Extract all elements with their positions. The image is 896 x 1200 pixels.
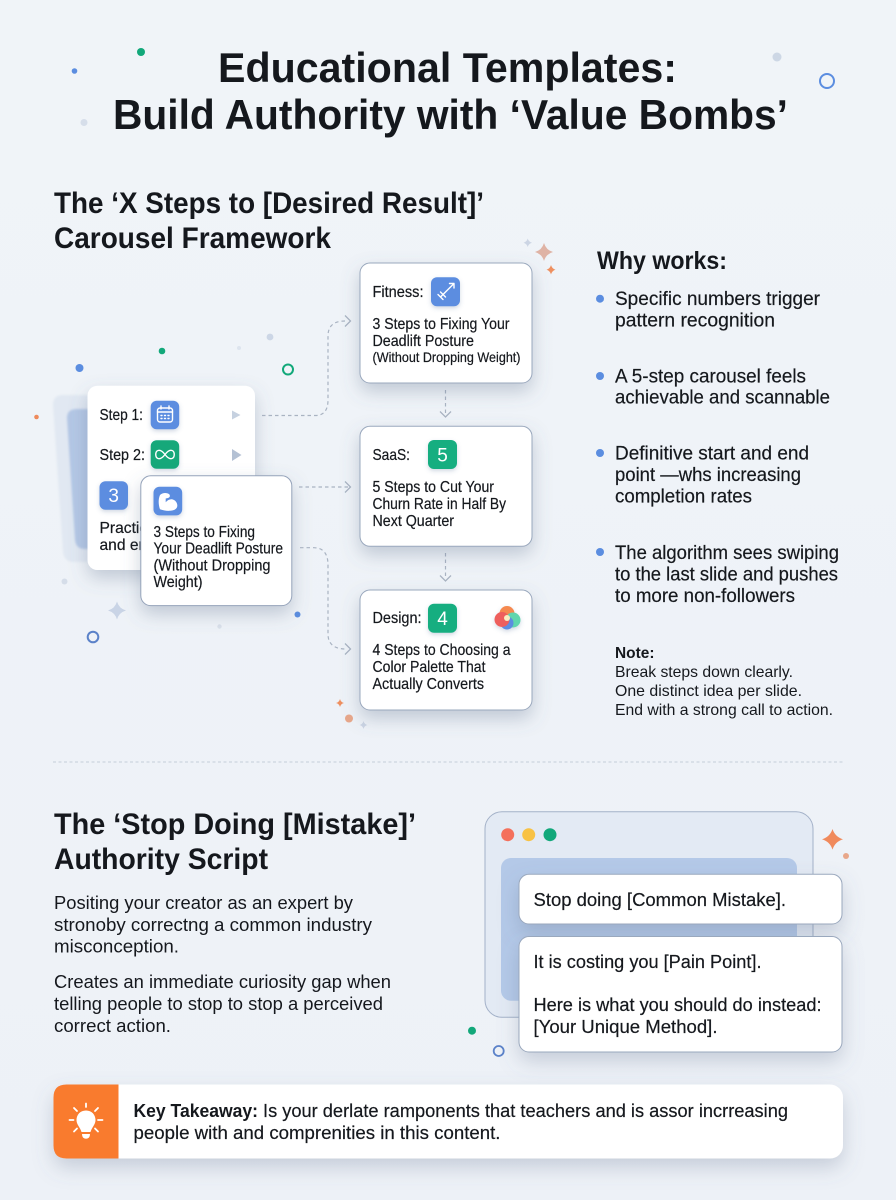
text block: curiosity gap paragraph: Creates an immediate curiosity gap when (54, 971, 391, 992)
bullet 2 (596, 366, 830, 408)
heading: why works: Why works: (597, 247, 727, 275)
script bubble: stop doing: Stop doing [Common Mistake]. (534, 889, 786, 910)
title: Build Authority with ‘Value Bombs’ (113, 91, 788, 138)
text block: positioning paragraph (54, 892, 373, 956)
bullet 1 (596, 288, 820, 332)
script bubble: pain point and method (519, 936, 842, 1052)
arrow: steps card to fitness card (262, 316, 350, 416)
note: Note: (615, 645, 654, 662)
icon: calendar (151, 401, 179, 429)
bullet 4 (596, 542, 839, 607)
callout: key takeaway (54, 1084, 843, 1158)
panel: saas card: Churn Rate in Half By (372, 496, 506, 513)
arrow: overlay card to saas card (299, 482, 350, 492)
steps card (88, 386, 255, 570)
script bubble: pain point and method: [Your Unique Method]. (534, 1016, 718, 1037)
overlay example card: 3 Steps to Fixing (154, 524, 255, 541)
icon: infinity (151, 440, 179, 469)
bullet 3: Definitive start and end (615, 442, 809, 464)
icon: dumbbell (431, 277, 460, 306)
panel: fitness card: Fitness: (372, 284, 424, 301)
overlay example card: Your Deadlift Posture (154, 540, 283, 558)
panel: saas card: Next Quarter (372, 513, 454, 530)
text block: positioning paragraph: stronoby correctng a common industry (54, 914, 373, 935)
steps card: Step 1: (100, 407, 143, 424)
bullet 4: The algorithm sees swiping (615, 542, 839, 564)
overlay example card: Weight) (154, 574, 202, 591)
badge: 5: 5 (437, 446, 448, 466)
text block: positioning paragraph: misconception. (54, 936, 179, 956)
back slide outer (53, 395, 110, 562)
callout: key takeaway: Key Takeaway: (134, 1100, 258, 1121)
bullet 3 (596, 442, 809, 508)
browser window illustration (485, 812, 813, 1017)
icon panel: orange tab (54, 1084, 118, 1158)
heading: X steps carousel framework: The ‘X Steps to [Desired Result]’ (54, 187, 484, 220)
panel: saas card (360, 426, 532, 546)
arrow: step 1 (232, 410, 240, 420)
arrow: fitness to saas (440, 390, 451, 417)
text block: curiosity gap paragraph (54, 971, 391, 1036)
heading: stop doing authority script: The ‘Stop Doing [Mistake]’ (54, 808, 416, 841)
steps card: and end (100, 537, 156, 554)
overlay example card: (Without Dropping (154, 558, 270, 574)
panel: fitness card: Deadlift Posture (372, 333, 474, 350)
overlay example card (141, 476, 292, 606)
script bubble: pain point and method: Here is what you should do instead: (534, 994, 822, 1015)
note: End with a strong call to action. (615, 702, 833, 719)
steps card: Practice (100, 520, 156, 537)
icon: colour palette (494, 606, 520, 630)
badge: 4: 4 (437, 609, 448, 630)
carousel stack illustration (53, 386, 292, 606)
badge: 5 (428, 440, 457, 469)
callout: key takeaway: Is your derlate ramponents that teachers and is assor incrreasing (263, 1100, 788, 1121)
badge: 3 (100, 481, 128, 510)
arrow: step 2 (232, 449, 242, 461)
callout: key takeaway: people with and comprenities in this content. (134, 1122, 500, 1143)
text block: positioning paragraph: Positing your creator as an expert by (54, 892, 354, 913)
heading: X steps carousel framework: Carousel Framework (54, 222, 331, 255)
panel: design card: Design: (372, 610, 422, 627)
icon: flexed arm (154, 487, 182, 515)
panel: why works (596, 247, 839, 719)
badge: 3: 3 (108, 486, 119, 507)
heading: X steps carousel framework (54, 187, 484, 255)
window content area (501, 858, 797, 1001)
window controls (501, 828, 556, 841)
arrow: overlay card to design card (300, 548, 350, 654)
icon: light bulb (70, 1104, 102, 1139)
text block: curiosity gap paragraph: correct action. (54, 1015, 171, 1036)
panel: design card: Color Palette That (372, 659, 486, 676)
script bubble: pain point and method: It is costing you [Pain Point]. (534, 951, 762, 972)
heading: stop doing authority script (54, 808, 416, 876)
note: One distinct idea per slide. (615, 683, 802, 700)
arrow: saas to design (440, 553, 451, 581)
note: Break steps down clearly. (615, 664, 793, 681)
text block: curiosity gap paragraph: telling people to stop to stop a perceived (54, 993, 383, 1014)
bullet 1: Specific numbers trigger (615, 288, 820, 310)
bullet 3: completion rates (615, 486, 752, 508)
note (615, 645, 833, 719)
steps card: Step 2: (100, 447, 145, 464)
bullet 2: A 5-step carousel feels (615, 366, 806, 388)
bullet 4: to more non-followers (615, 585, 795, 607)
panel: fitness card (360, 263, 532, 383)
title: Educational Templates: (218, 44, 677, 91)
back slide inner (67, 409, 110, 549)
panel: design card (360, 590, 532, 710)
panel: design card: Actually Converts (372, 676, 484, 693)
script bubble: stop doing (519, 874, 842, 924)
bullet 2: achievable and scannable (615, 386, 830, 408)
panel: fitness card: (Without Dropping Weight) (372, 350, 520, 365)
panel: saas card: SaaS: (372, 447, 410, 464)
title (113, 44, 788, 138)
badge: 4 (428, 604, 457, 633)
bullet 1: pattern recognition (615, 310, 775, 332)
decorative dots and sparkles (34, 48, 849, 1056)
panel: fitness card: 3 Steps to Fixing Your (372, 316, 510, 333)
bullet 4: to the last slide and pushes (615, 564, 838, 586)
bullet 3: point —whs increasing (615, 464, 801, 486)
panel: saas card: 5 Steps to Cut Your (372, 479, 494, 496)
heading: stop doing authority script: Authority Script (54, 843, 268, 876)
panel: design card: 4 Steps to Choosing a (372, 642, 511, 659)
